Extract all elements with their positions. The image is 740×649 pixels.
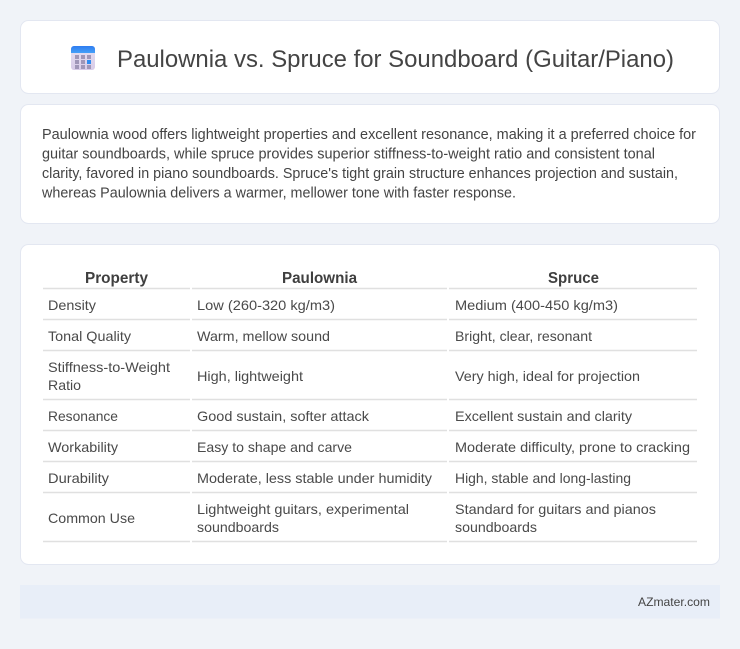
text block: introduction: clarity, favored in piano soundboards. Spruce's tight grain structure enhances projection and sustain,: [42, 166, 678, 182]
table row: workability: Easy to shape and carve: [197, 439, 352, 455]
table header row: Property: [85, 270, 148, 287]
table row: common use: Lightweight guitars, experimental: [197, 501, 409, 517]
text block: introduction: [41, 127, 696, 202]
table row: durability: High, stable and long-lasting: [455, 470, 631, 486]
table row: common use: Standard for guitars and pianos: [455, 501, 656, 517]
table row: resonance: Good sustain, softer attack: [197, 408, 370, 424]
table row: stiffness-to-weight ratio: High, lightweight: [197, 368, 303, 384]
table row: resonance: Resonance: [48, 408, 118, 424]
table row: density: Density: [48, 297, 96, 313]
panel: introduction: [20, 104, 720, 224]
table row: workability: [43, 439, 697, 462]
table header row: Spruce: [548, 270, 599, 287]
table row: stiffness-to-weight ratio: Stiffness-to-Weight: [48, 359, 170, 375]
table row: resonance: Excellent sustain and clarity: [455, 408, 632, 424]
table row: durability: [43, 470, 697, 492]
table header row: Paulownia: [282, 270, 357, 287]
text block: introduction: guitar soundboards, while spruce provides superior stiffness-to-weight ratio and consistent tonal: [42, 146, 655, 162]
table row: tonal quality: Bright, clear, resonant: [455, 328, 592, 344]
table row: common use: soundboards: [197, 519, 279, 535]
text block: introduction: Paulownia wood offers lightweight properties and excellent resonance, making it a preferred choice for: [42, 127, 696, 143]
table row: resonance: [43, 408, 697, 430]
text block: introduction: whereas Paulownia delivers a warmer, mellower tone with faster response.: [41, 186, 516, 202]
table row: common use: [43, 501, 697, 542]
icon: calendar: [71, 46, 95, 70]
footer credit: AZmater.com: [638, 595, 710, 609]
title: Paulownia vs. Spruce for Soundboard (Guitar/Piano): [117, 46, 674, 73]
table row: durability: Moderate, less stable under humidity: [197, 470, 432, 486]
table header row: [43, 270, 697, 288]
table row: stiffness-to-weight ratio: Very high, ideal for projection: [455, 368, 640, 384]
table row: density: [43, 297, 697, 320]
table row: tonal quality: Tonal Quality: [48, 328, 131, 344]
panel: comparison table: [20, 244, 720, 564]
table row: common use: Common Use: [48, 510, 135, 526]
table row: workability: Workability: [48, 439, 118, 455]
table row: density: Low (260-320 kg/m3): [197, 297, 335, 313]
footer bar: [20, 585, 720, 618]
table row: workability: Moderate difficulty, prone to cracking: [455, 439, 690, 455]
panel: header: [20, 20, 720, 94]
table row: stiffness-to-weight ratio: [43, 359, 697, 400]
table row: stiffness-to-weight ratio: Ratio: [48, 377, 81, 393]
table row: tonal quality: [43, 328, 697, 350]
table row: common use: soundboards: [455, 519, 537, 535]
table row: durability: Durability: [48, 470, 109, 486]
table row: density: Medium (400-450 kg/m3): [455, 297, 618, 313]
table row: tonal quality: Warm, mellow sound: [197, 328, 330, 344]
